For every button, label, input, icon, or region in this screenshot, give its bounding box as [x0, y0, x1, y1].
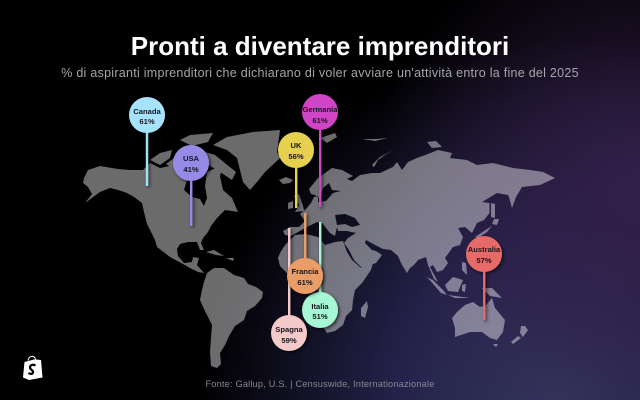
title: Pronti a diventare imprenditori: [131, 31, 509, 61]
pin: Spagna: [271, 228, 307, 351]
pin: USA: [173, 145, 209, 226]
pin: UK: [278, 132, 314, 208]
arctic islands: [320, 133, 442, 167]
pin: Canada: Canada: [133, 107, 161, 116]
pin: Australia: [466, 236, 502, 320]
Greenland: [213, 130, 280, 190]
pin: Germania: Germania: [302, 105, 338, 114]
South-East Asia islands: [427, 262, 502, 298]
pin: Australia: 57%: [476, 256, 492, 265]
Madagascar: [361, 301, 368, 318]
pin: Canada: [129, 97, 165, 186]
pin: UK: 56%: [288, 152, 304, 161]
South America: [200, 268, 263, 368]
North America: [83, 163, 238, 273]
pin: Italia: 51%: [312, 312, 328, 321]
Japan and Sakhalin: [475, 203, 499, 238]
subtitle: % di aspiranti imprenditori che dichiarano di voler avviare un'attività entro la fine del 2025: [61, 66, 579, 80]
pin: UK: UK: [291, 141, 302, 150]
Eurasia: [283, 150, 555, 282]
pin: Spagna: Spagna: [275, 325, 303, 334]
Iceland: [279, 177, 293, 184]
Africa: [278, 234, 373, 333]
source note: Fonte: Gallup, U.S. | Censuswide, Internationazionale: [205, 379, 434, 389]
pin: Canada: 61%: [139, 117, 155, 126]
Australia: [452, 298, 505, 340]
pin: Australia: Australia: [468, 245, 501, 254]
pin: Germania: [302, 94, 338, 207]
pin: Spagna: 59%: [281, 336, 297, 345]
Great Britain and Ireland: [288, 194, 304, 212]
pin: Italia: Italia: [311, 302, 329, 311]
pin: Italia: [302, 222, 338, 328]
pin: USA: USA: [183, 154, 200, 163]
Cuba and Caribbean: [206, 250, 234, 261]
pin: USA: 41%: [183, 165, 199, 174]
Tasmania and New Zealand: [493, 326, 528, 347]
Canadian arctic islands: [150, 133, 236, 180]
pin: Francia: [287, 213, 323, 294]
pin: Germania: 61%: [312, 116, 328, 125]
pin: Francia: Francia: [291, 267, 319, 276]
pin: Francia: 61%: [297, 278, 313, 287]
